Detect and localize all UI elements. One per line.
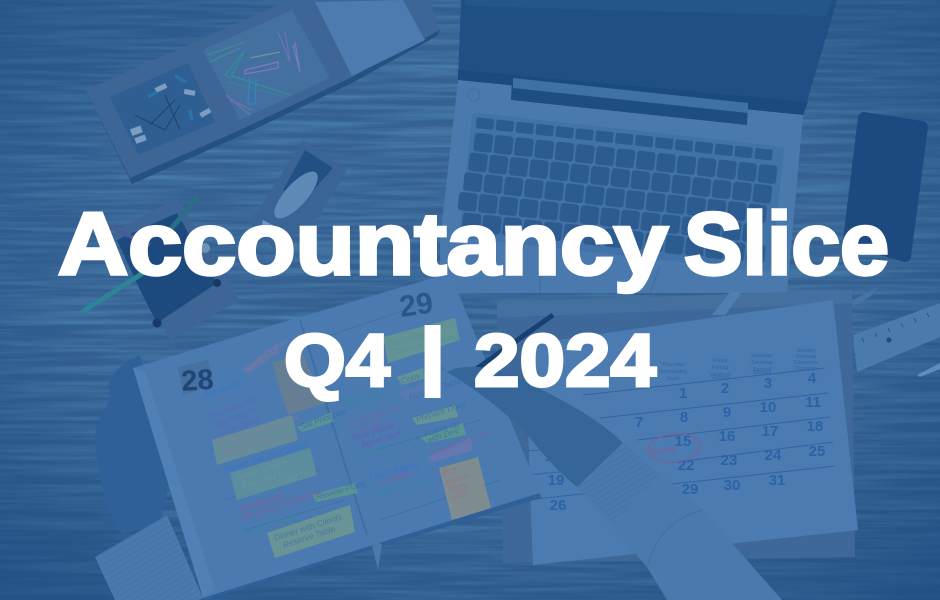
calendar weekday labels: Samstag [751, 360, 773, 366]
calendar numbers: 4 [808, 370, 817, 387]
calendar numbers: 12 [545, 448, 561, 465]
laptop trackpad [540, 256, 660, 293]
calendar weekday labels: Saturday [751, 353, 773, 359]
subtitle: Q4 [284, 319, 390, 402]
subtitle: 2024 [474, 319, 656, 402]
planner handwriting: Real Estate [351, 420, 396, 443]
right shirt sleeve [577, 443, 782, 600]
desk tray with paper clips [86, 0, 440, 184]
planner handwriting: Buy [441, 464, 458, 477]
calendar weekday labels: Viernes [711, 375, 730, 381]
calendar weekday labels: Sabado [753, 370, 771, 376]
calendar numbers: 24 [765, 447, 782, 464]
laptop keyboard [454, 112, 784, 272]
ruler [853, 287, 940, 377]
planner handwriting: Presentation [345, 387, 393, 411]
planner handwriting: Copy Slides [400, 362, 446, 386]
planner handwriting: Pickup Car from Dealer [223, 438, 311, 475]
planner handwriting: Set Priorities [298, 406, 348, 432]
planner handwriting: Get Clothes [386, 328, 433, 349]
calendar numbers: 18 [807, 418, 823, 435]
planner handwriting: Project Plan [223, 433, 269, 457]
calendar weekday labels: Sonntag [796, 354, 816, 360]
left compartment with pins [110, 63, 215, 155]
planner handwriting: Marketing Department [240, 486, 323, 522]
planner handwriting: Yoga Classes [245, 511, 298, 537]
power button [468, 89, 480, 101]
planner handwriting: Bacon [444, 470, 470, 486]
planner handwriting: Dinner with Clients [273, 511, 344, 543]
doctor appointment circle: Doctor [650, 443, 678, 457]
title: Slice [684, 194, 889, 293]
laptop [440, 0, 837, 293]
subtitle [284, 316, 656, 402]
planner handwriting: Prepare new Milestone [216, 411, 302, 448]
calendar numbers [545, 370, 825, 514]
subtitle: | [423, 316, 442, 395]
calendar weekday labels: Dimanche [794, 360, 818, 366]
sticky note pad [315, 0, 425, 76]
calendar numbers: 10 [760, 399, 776, 416]
calendar numbers: 26 [550, 497, 566, 514]
planner handwriting: Finish Report [368, 459, 420, 483]
title [58, 194, 889, 293]
planner handwriting: Manager to [213, 404, 257, 430]
calendar weekday labels: Samedi [753, 367, 771, 373]
calendar weekday labels: Domingo [795, 366, 817, 372]
laptop hinge [511, 78, 748, 125]
calendar numbers: 8 [680, 409, 688, 426]
planner handwriting: Deadline [380, 467, 415, 486]
calendar numbers: 23 [721, 452, 737, 469]
calendar numbers: 22 [678, 457, 694, 474]
calendar weekday labels: Friday [712, 358, 728, 364]
planner handwriting: Investors [353, 416, 389, 436]
calendar numbers: 3 [764, 375, 772, 392]
calendar numbers: 2 [721, 380, 729, 397]
planner sticky notes [212, 318, 491, 558]
bookmark ribbon [370, 537, 382, 570]
planner handwriting: Prepare Docs [415, 398, 468, 424]
calendar rules [527, 368, 835, 500]
planner handwriting: Introduce new [207, 392, 261, 422]
planner handwriting: Agent Appt [359, 427, 403, 450]
calendar weekday labels: Donnerstag [659, 369, 687, 375]
planner handwriting: Reserve Table [408, 375, 463, 402]
open planner notebook [133, 273, 541, 600]
planner handwriting: Chemical Cleaning [388, 331, 460, 358]
calendar numbers: 29 [682, 481, 698, 498]
calendar page [525, 300, 858, 565]
page number 28: 28 [180, 364, 215, 398]
calendar weekday labels: Sunday [797, 348, 816, 354]
planner handwriting: Lunch with new [345, 401, 404, 429]
calendar weekday labels: Jeudi [666, 376, 680, 382]
doctor appointment circle [647, 431, 701, 465]
planner handwriting: Swimming Pool [371, 474, 431, 500]
calendar numbers: 9 [723, 404, 731, 421]
calendar numbers: 31 [769, 472, 785, 489]
planner handwriting: Follow up [423, 418, 460, 439]
calendar weekday labels: Vendredi [709, 372, 731, 378]
title: Accountancy [58, 194, 668, 293]
left hand [95, 355, 170, 535]
calendar numbers: 1 [679, 385, 687, 402]
planner handwriting: New Project [338, 382, 385, 406]
calendar numbers: 15 [675, 433, 691, 450]
calendar weekday labels [659, 348, 818, 382]
page number 29: 29 [397, 287, 435, 324]
right hand holding pen [447, 315, 623, 487]
laptop lid and screen [458, 0, 837, 115]
calendar weekday labels: Freitag [711, 365, 729, 371]
planner handwriting: Review Plans [315, 478, 368, 502]
planner handwriting: Review and Test [254, 466, 317, 495]
calendar numbers: 25 [809, 443, 825, 460]
calendar numbers: 19 [548, 472, 564, 489]
tape dispenser [250, 140, 347, 250]
planner handwriting: Meditation [204, 377, 244, 399]
planner handwriting: Colleagues [219, 412, 263, 438]
planner handwriting: Upload Party bill [429, 427, 492, 458]
planner handwriting: Select Service [234, 457, 289, 483]
calendar numbers: 7 [635, 414, 643, 431]
laptop body [440, 80, 803, 293]
calendar backing board [497, 290, 855, 563]
planner handwriting: Meeting with [238, 490, 286, 514]
planner handwriting: Spent Clothes [241, 335, 291, 375]
calendar numbers: 17 [762, 423, 778, 440]
calendar numbers: 16 [719, 428, 735, 445]
planner handwriting: Dentist Appt [360, 437, 407, 460]
calendar numbers: 11 [805, 394, 821, 411]
planner handwriting: with Dev [426, 425, 460, 445]
planner handwriting: Providers for [241, 467, 291, 492]
calendar numbers: 30 [724, 477, 740, 494]
phone [849, 118, 922, 256]
planner handwriting: Milk [450, 488, 468, 502]
planner handwriting [204, 328, 492, 550]
right compartment with paper clips [203, 10, 330, 120]
planner handwriting: Eggs [447, 479, 469, 494]
pencil holder [82, 197, 240, 340]
planner handwriting: Reserve Table [282, 523, 337, 550]
calendar weekday labels: Thursday [662, 362, 685, 368]
left shirt sleeve [95, 515, 203, 600]
